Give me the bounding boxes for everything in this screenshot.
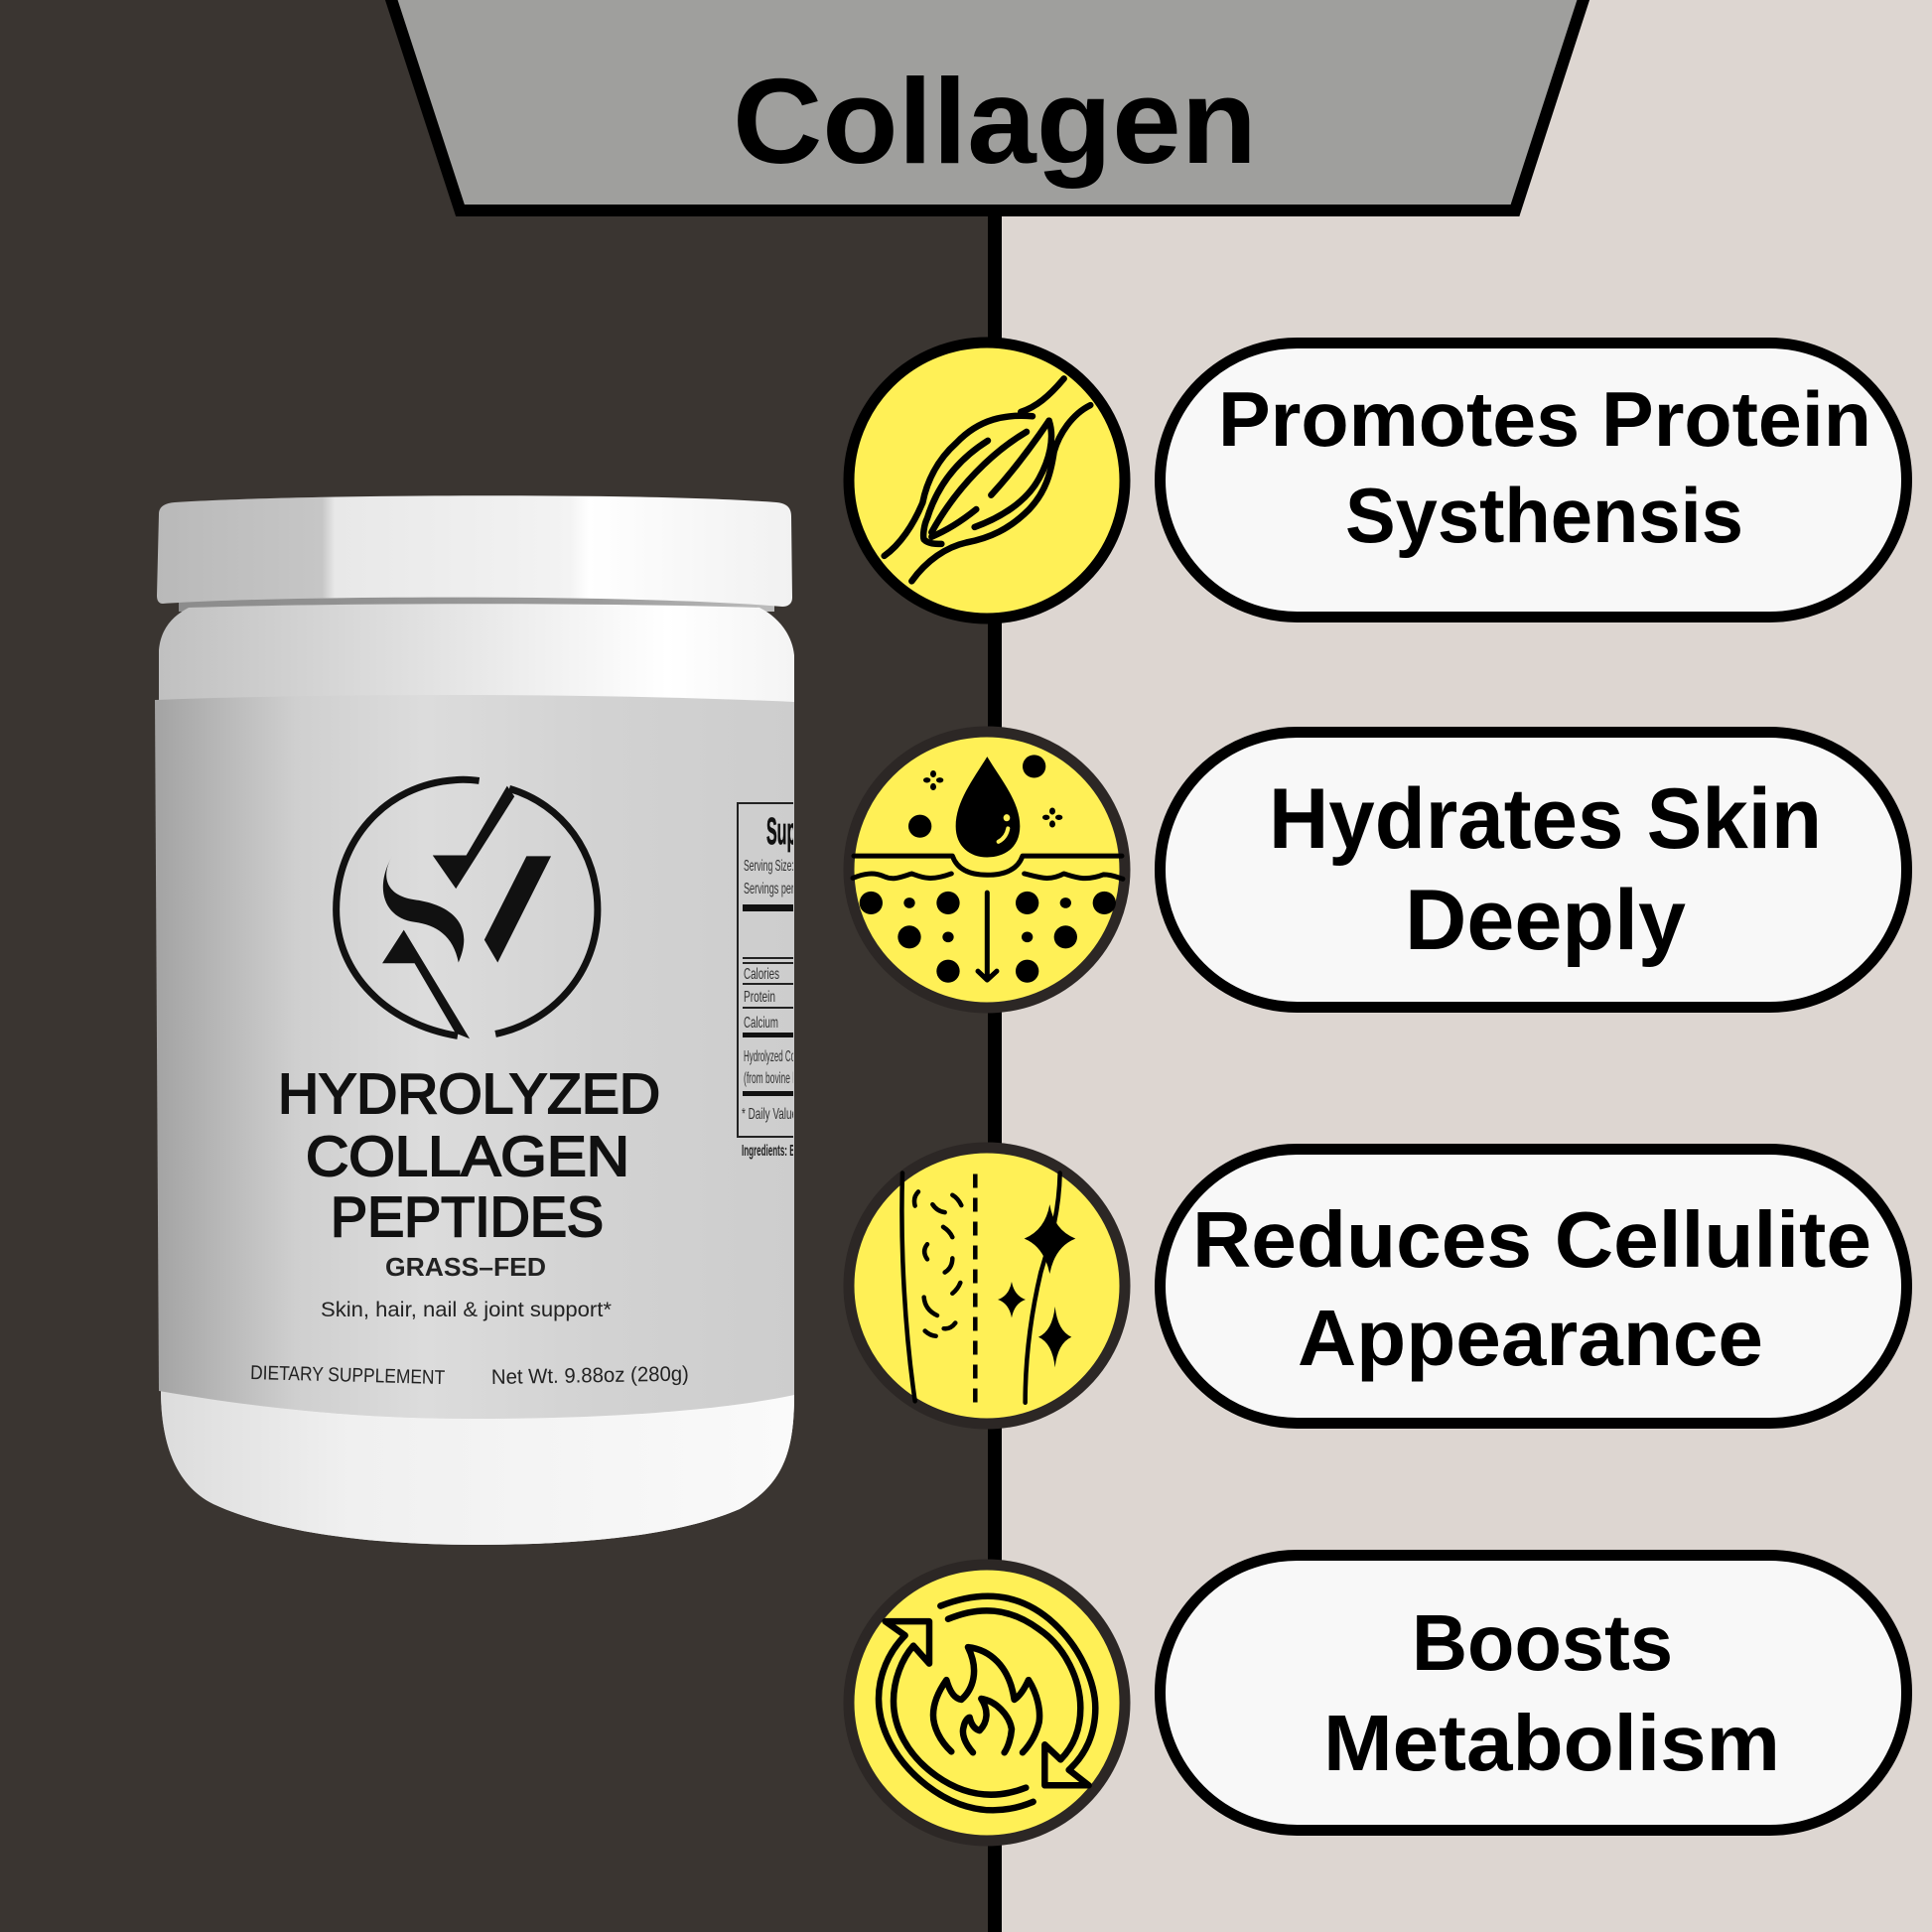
net weight: Net Wt. 9.88oz (280g): [491, 1363, 689, 1389]
product name: COLLAGEN: [306, 1125, 629, 1188]
pill 1 text: [1218, 375, 1871, 559]
pill 1: promotes protein synthesis: [1160, 344, 1906, 618]
logo S: [383, 856, 464, 963]
product name: HYDROLYZED: [278, 1062, 660, 1126]
muscle line art: [885, 378, 1090, 581]
pill 1 text: Promotes Protein: [1218, 375, 1871, 463]
product jar: [155, 495, 817, 1545]
supplement facts panel: Serving Size: 1: [744, 858, 801, 875]
title banner: [388, 0, 1587, 210]
supplement facts panel: Calcium: [744, 1015, 778, 1032]
pill 3 text: Reduces Cellulite: [1192, 1195, 1871, 1284]
pill 4 text: [1323, 1598, 1780, 1787]
jar lower white band: [161, 1390, 794, 1545]
drop highlight: [999, 814, 1010, 842]
skin lines: [853, 856, 1123, 980]
sparkles: [998, 1204, 1075, 1367]
pill 3: reduces cellulite: [1160, 1150, 1906, 1424]
logo ring arcs: [337, 779, 598, 1035]
pill 4 text: Boosts: [1412, 1598, 1673, 1687]
icon 1: muscle: [849, 343, 1125, 619]
supplement facts panel: * Daily Value: [742, 1106, 797, 1123]
supplement facts panel: Calories: [744, 966, 779, 983]
dietary supplement: DIETARY SUPPLEMENT: [250, 1362, 445, 1389]
icon 4: metabolism flame: [849, 1565, 1125, 1841]
pill 4 text: Metabolism: [1323, 1699, 1780, 1787]
tagline: Skin, hair, nail & joint support*: [321, 1299, 612, 1321]
cycle arrows and flame: [879, 1596, 1095, 1810]
brand logo: [337, 779, 598, 1038]
grass-fed line: GRASS–FED: [385, 1252, 546, 1282]
water drop: [956, 757, 1020, 857]
supplement facts panel: Ingredients: B: [742, 1143, 795, 1160]
jar lid: [157, 495, 792, 607]
background: light right half: [1001, 0, 1932, 1932]
supplement facts panel: (from bovine h: [744, 1070, 797, 1087]
product name: [278, 1062, 660, 1249]
pill 2 text: [1269, 771, 1822, 968]
supplement facts panel: [737, 802, 793, 1160]
jar label: [155, 695, 794, 1419]
supplement facts panel: Hydrolyzed Co: [744, 1048, 795, 1065]
supplement facts panel: Protein: [744, 989, 775, 1006]
logo arrow shape: [382, 930, 470, 1038]
moisture dots: [860, 755, 1116, 983]
icon 2: hydration drop: [849, 732, 1125, 1008]
jar neck: [179, 594, 774, 612]
jar body: [159, 604, 794, 1545]
logo tick shape: [433, 786, 514, 889]
pill 2 text: Hydrates Skin: [1269, 771, 1822, 867]
logo slash: [484, 856, 551, 963]
leg lines and dimples: [901, 1173, 1060, 1403]
pill 3 text: Appearance: [1298, 1294, 1763, 1382]
background: dark left half: [0, 0, 988, 1932]
supplement facts panel: Servings per c: [744, 881, 801, 897]
centre divider line: [988, 0, 1002, 1932]
pill 1 text: Systhensis: [1345, 472, 1743, 559]
supplement facts panel: Supp: [766, 811, 806, 853]
pill 2 text: Deeply: [1405, 873, 1686, 968]
title text: Collagen: [733, 54, 1257, 189]
pill 2: hydrates skin: [1160, 733, 1906, 1007]
pill 3 text: [1192, 1195, 1871, 1382]
icon 3: cellulite smoothing: [849, 1148, 1125, 1424]
pill 4: boosts metabolism: [1160, 1555, 1906, 1831]
product name: PEPTIDES: [331, 1185, 604, 1249]
hydration art: [853, 755, 1123, 983]
